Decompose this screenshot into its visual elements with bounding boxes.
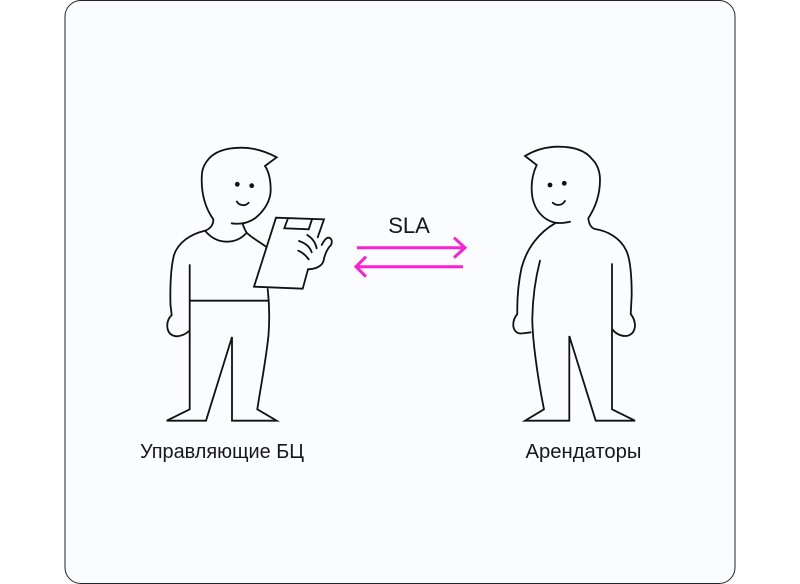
torso, belt and legs: [167, 265, 277, 421]
label: tenants: Арендаторы: [526, 441, 642, 463]
figure: building manager: [167, 148, 332, 421]
label: SLA: SLA: [388, 213, 430, 238]
face: [235, 182, 254, 205]
collar and neck: [205, 223, 266, 247]
inner arm lines: [525, 261, 635, 421]
head and hair: [167, 148, 277, 336]
face: [548, 181, 567, 205]
hand with fingers: [298, 235, 332, 269]
label: managers: Управляющие БЦ: [140, 441, 304, 463]
figure: tenant: [513, 147, 635, 421]
body outline: [513, 147, 635, 336]
arrow: right: [357, 238, 465, 258]
arrow: left: [356, 257, 463, 277]
clipboard: [254, 218, 324, 289]
